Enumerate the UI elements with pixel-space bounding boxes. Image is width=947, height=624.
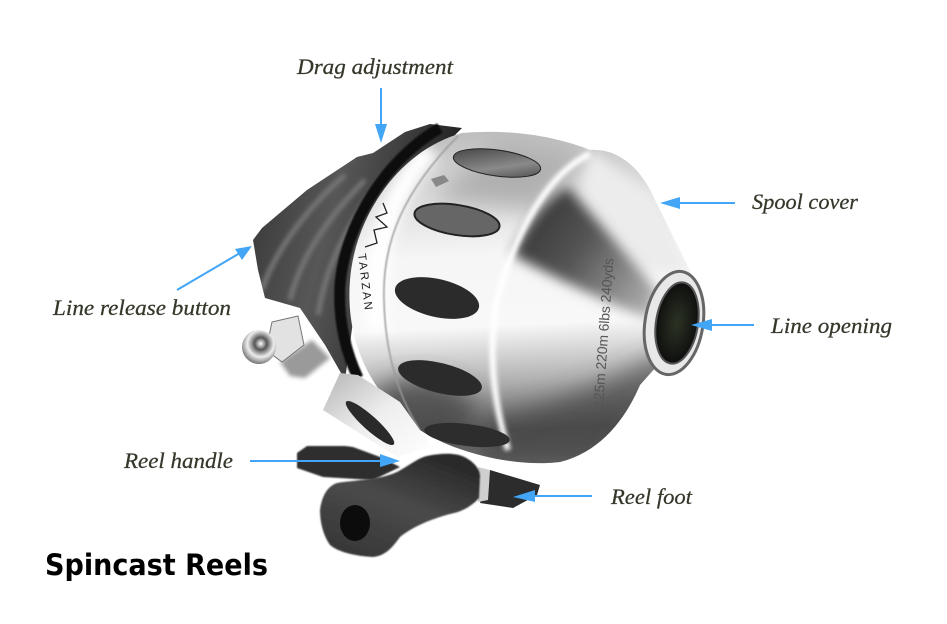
handle arm plate [323, 373, 432, 457]
band seam [384, 136, 458, 430]
button ridges [261, 174, 368, 316]
arrow: line release button [177, 246, 252, 290]
arm slot [342, 396, 398, 450]
line opening ring [637, 267, 711, 379]
band highlight [376, 150, 430, 330]
handle ring [478, 467, 490, 502]
small square marker [431, 175, 449, 187]
nut ball [242, 330, 276, 364]
vent 5 [423, 419, 511, 451]
label: reel foot: Reel foot [610, 484, 693, 509]
upper cone light [580, 150, 681, 269]
front foot [480, 470, 540, 508]
spool cover body [349, 132, 691, 464]
line opening hole [650, 279, 704, 367]
grip hole [340, 505, 370, 541]
vent 2 [412, 198, 502, 242]
illustration: spincast reel [240, 110, 711, 557]
shoulder seam [493, 154, 590, 450]
arrow: reel handle [250, 454, 400, 467]
brand logo mark [365, 203, 387, 247]
label: line opening: Line opening [770, 313, 892, 338]
arrow: spool cover [660, 197, 735, 209]
vent 1 [452, 144, 542, 182]
handle grip [320, 454, 480, 557]
cone dark wedge [513, 187, 657, 318]
brand name: TARZAN [355, 253, 374, 313]
label: drag adjustment: Drag adjustment [296, 54, 454, 79]
cone print: 125m 220m 6lbs 240yds [590, 257, 616, 408]
lower shadow [473, 346, 654, 464]
rear foot [297, 446, 400, 480]
black sealing ring [340, 128, 440, 378]
arrow: drag adjustment [375, 88, 387, 143]
nut plate [280, 340, 330, 378]
hex nut [266, 316, 304, 362]
vent 3 [391, 270, 483, 326]
vent 4 [395, 353, 485, 403]
top shade [430, 140, 590, 210]
line release button [253, 124, 462, 374]
arrow: line opening [691, 319, 754, 331]
lower left shade [365, 377, 475, 453]
title: Spincast Reels [45, 548, 268, 582]
arrow: reel foot [513, 490, 592, 502]
label: spool cover: Spool cover [752, 189, 858, 214]
label: line release button: Line release button [52, 295, 231, 320]
label: reel handle: Reel handle [123, 448, 233, 473]
